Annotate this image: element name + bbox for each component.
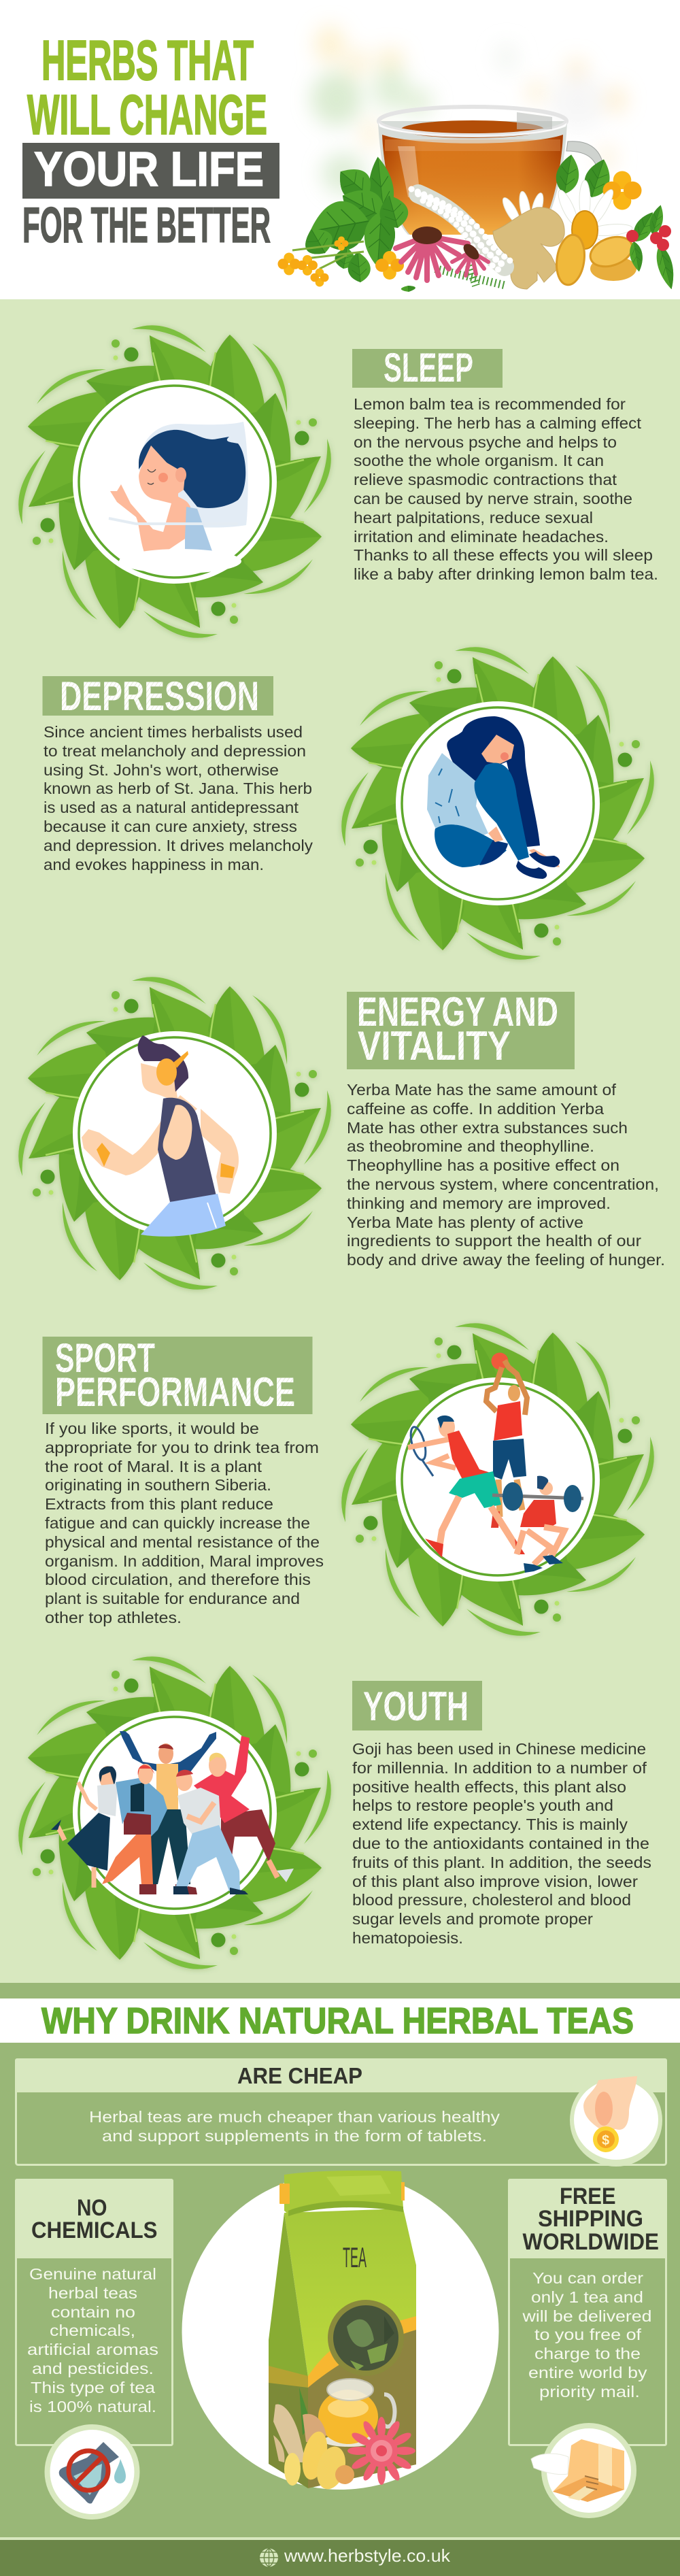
tea cup illustration <box>378 107 604 235</box>
title: FOR THE BETTER <box>22 198 271 253</box>
ginger and leaves on bag <box>273 2388 354 2492</box>
white circle behind tea bag <box>182 2173 499 2490</box>
section: sport performance <box>42 1323 654 1636</box>
wreath with sad woman <box>341 647 654 960</box>
body text: plant is suitable for endurance and <box>45 1590 300 1607</box>
woman in dress <box>51 1766 125 1888</box>
body text: blood circulation, and therefore this <box>45 1571 311 1588</box>
heading: PERFORMANCE <box>55 1369 295 1415</box>
icon: parcel and glove <box>531 2423 636 2518</box>
body text: known as herb of St. Jana. This herb <box>44 780 312 797</box>
body text: fruits of this plant. In addition, the seeds <box>352 1854 651 1871</box>
section: energy and vitality <box>18 977 665 1290</box>
bag fold <box>284 2171 403 2214</box>
heading <box>42 1335 313 1415</box>
body text: Thanks to all these effects you will sleep <box>354 546 653 564</box>
heading: DEPRESSION <box>60 673 259 719</box>
body text: hematopoiesis. <box>352 1929 463 1947</box>
footer <box>0 2537 680 2576</box>
body text: appropriate for you to drink tea from <box>45 1439 319 1456</box>
echinacea flowers <box>396 227 488 280</box>
panel: no chemicals: NO <box>77 2195 107 2221</box>
body text: body and drive away the feeling of hunger. <box>347 1251 665 1269</box>
heading: YOUTH <box>363 1684 469 1729</box>
panel: free shipping worldwide: only 1 tea and <box>531 2288 643 2306</box>
title <box>22 29 279 253</box>
panel: free shipping worldwide: priority mail. <box>539 2383 640 2401</box>
body text: blood pressure, cholesterol and blood <box>352 1891 631 1909</box>
section: why drink natural herbal teas <box>0 1983 680 2537</box>
body text: helps to restore people's youth and <box>352 1796 613 1814</box>
panel: free shipping worldwide: You can order <box>532 2269 643 2287</box>
heading <box>347 989 575 1069</box>
icon: hand with coin: $ <box>602 2133 609 2148</box>
body text: relieve spasmodic contractions that <box>354 471 617 488</box>
website url: www.herbstyle.co.uk <box>284 2545 451 2566</box>
panel: no chemicals <box>15 2179 173 2520</box>
body text: caffeine as coffe. In addition Yerba <box>347 1100 604 1118</box>
body text: irritation and eliminate headaches. <box>354 528 609 546</box>
body text: to treat melancholy and depression <box>44 742 306 760</box>
yarrow flowers <box>411 189 511 271</box>
bag window with leaves <box>328 2300 404 2376</box>
panel: free shipping worldwide <box>508 2179 667 2518</box>
title: WILL CHANGE <box>27 83 267 146</box>
body text: because it can cure anxiety, stress <box>44 818 297 835</box>
title: YOUR LIFE <box>34 143 264 197</box>
panel: no chemicals: herbal teas <box>48 2284 137 2302</box>
icon: globe <box>260 2548 278 2567</box>
body text: can be caused by nerve strain, soothe <box>354 490 632 507</box>
body text: and depression. It drives melancholy <box>44 837 313 854</box>
body text: sleeping. The herb has a calming effect <box>354 414 642 432</box>
small cup picture <box>318 2379 394 2447</box>
panel: no chemicals: CHEMICALS <box>31 2218 158 2243</box>
body text: Mate has other extra substances such <box>347 1119 628 1137</box>
red-haired woman <box>102 1764 167 1884</box>
title: HERBS THAT <box>41 29 254 92</box>
body text: for millennia. In addition to a number of <box>352 1759 647 1777</box>
panel: no chemicals: chemicals, <box>50 2322 135 2339</box>
tea bag illustration: TEA <box>343 2241 367 2273</box>
body text: the root of Maral. It is a plant <box>45 1458 262 1475</box>
mint leaves <box>292 153 615 292</box>
wreath with group of friends <box>18 1656 331 1969</box>
panel: are cheap: Herbal teas are much cheaper than various healthy <box>89 2108 500 2126</box>
body text: on the nervous psyche and helps to <box>354 433 617 451</box>
panel: no chemicals: and pesticides. <box>32 2360 154 2377</box>
daisy <box>500 180 633 267</box>
panel: are cheap: ARE CHEAP <box>237 2063 362 2088</box>
body text: thinking and memory are improved. <box>347 1194 611 1212</box>
body text: the nervous system, where concentration, <box>347 1175 659 1193</box>
body text: other top athletes. <box>45 1609 182 1626</box>
basketball player <box>486 1352 527 1528</box>
body text: as theobromine and theophylline. <box>347 1137 594 1155</box>
tennis player <box>408 1416 525 1558</box>
body text: Since ancient times herbalists used <box>44 723 303 741</box>
body text: fatigue and can quickly increase the <box>45 1514 310 1532</box>
body text: heart palpitations, reduce sexual <box>354 509 593 526</box>
body text: due to the antioxidants contained in the <box>352 1835 649 1852</box>
header panel <box>0 0 680 299</box>
young man in cap <box>173 1770 248 1894</box>
body text: organism. In addition, Maral improves <box>45 1552 324 1570</box>
body text: Goji has been used in Chinese medicine <box>352 1740 646 1758</box>
body text <box>45 1420 324 1626</box>
heading: SLEEP <box>384 345 473 390</box>
panel: no chemicals: Genuine natural <box>29 2265 156 2283</box>
body text: Theophylline has a positive effect on <box>347 1156 619 1174</box>
heading: ENERGY AND <box>357 989 558 1035</box>
icon: hand with coin <box>570 2074 662 2167</box>
body text: Yerba Mate has the same amount of <box>347 1081 617 1099</box>
body text: ingredients to support the health of our <box>347 1232 641 1250</box>
berries and leaves <box>626 203 679 291</box>
weight lifter <box>492 1476 583 1573</box>
body text: like a baby after drinking lemon balm tea. <box>354 565 658 583</box>
icon: crossed-out chemical flask <box>45 2424 140 2520</box>
cup handle <box>566 141 604 178</box>
section: depression <box>42 647 654 960</box>
panel: free shipping worldwide: entire world by <box>528 2364 647 2381</box>
body text: sugar levels and promote proper <box>352 1910 593 1928</box>
panel: no chemicals: contain no <box>51 2303 135 2321</box>
panel: are cheap <box>15 2058 667 2167</box>
body text <box>347 1081 665 1269</box>
panel: free shipping worldwide: charge to the <box>534 2345 641 2362</box>
small yellow flowers <box>277 171 642 287</box>
panel: free shipping worldwide: SHIPPING <box>538 2206 643 2232</box>
body text: and evokes happiness in man. <box>44 856 264 873</box>
wreath with sleeping woman <box>18 325 331 638</box>
panel: free shipping worldwide: to you free of <box>534 2326 642 2343</box>
tall man <box>120 1731 216 1894</box>
body text: soothe the whole organism. It can <box>354 452 604 469</box>
panel: free shipping worldwide: WORLDWIDE <box>522 2229 659 2255</box>
body text: Extracts from this plant reduce <box>45 1495 273 1513</box>
body text: using St. John's wort, otherwise <box>44 761 279 779</box>
heading: VITALITY <box>358 1023 511 1069</box>
body text: extend life expectancy. This is mainly <box>352 1816 628 1833</box>
panel: free shipping worldwide: will be delivered <box>522 2307 651 2325</box>
body text: of this plant also improve vision, lower <box>352 1873 638 1890</box>
body text <box>44 723 313 873</box>
body text: Yerba Mate has plenty of active <box>347 1214 583 1231</box>
section: sleep <box>18 325 658 638</box>
pink flower on bag <box>347 2417 415 2485</box>
heading: SPORT <box>55 1335 155 1381</box>
body text: Lemon balm tea is recommended for <box>354 395 626 413</box>
panel: no chemicals: This type of tea <box>31 2379 155 2396</box>
body text: positive health effects, this plant also <box>352 1778 626 1796</box>
wreath with athletes <box>341 1323 654 1636</box>
section: youth <box>18 1656 651 1969</box>
blurred herbs backdrop <box>311 25 626 194</box>
body text: physical and mental resistance of the <box>45 1533 320 1551</box>
ginger root <box>493 207 636 289</box>
body text: is used as a natural antidepressant <box>44 799 299 816</box>
wreath with runner <box>18 977 331 1290</box>
hoodie man <box>194 1736 294 1882</box>
body text <box>352 1740 651 1947</box>
panel: no chemicals: is 100% natural. <box>29 2398 156 2415</box>
body text: If you like sports, it would be <box>45 1420 259 1437</box>
panel: are cheap: and support supplements in the form of tablets. <box>102 2127 487 2145</box>
body text <box>354 395 658 583</box>
body text: originating in southern Siberia. <box>45 1476 271 1494</box>
panel: free shipping worldwide: FREE <box>560 2184 616 2209</box>
panel: no chemicals: artificial aromas <box>27 2341 158 2358</box>
tea bag illustration <box>269 2171 416 2492</box>
